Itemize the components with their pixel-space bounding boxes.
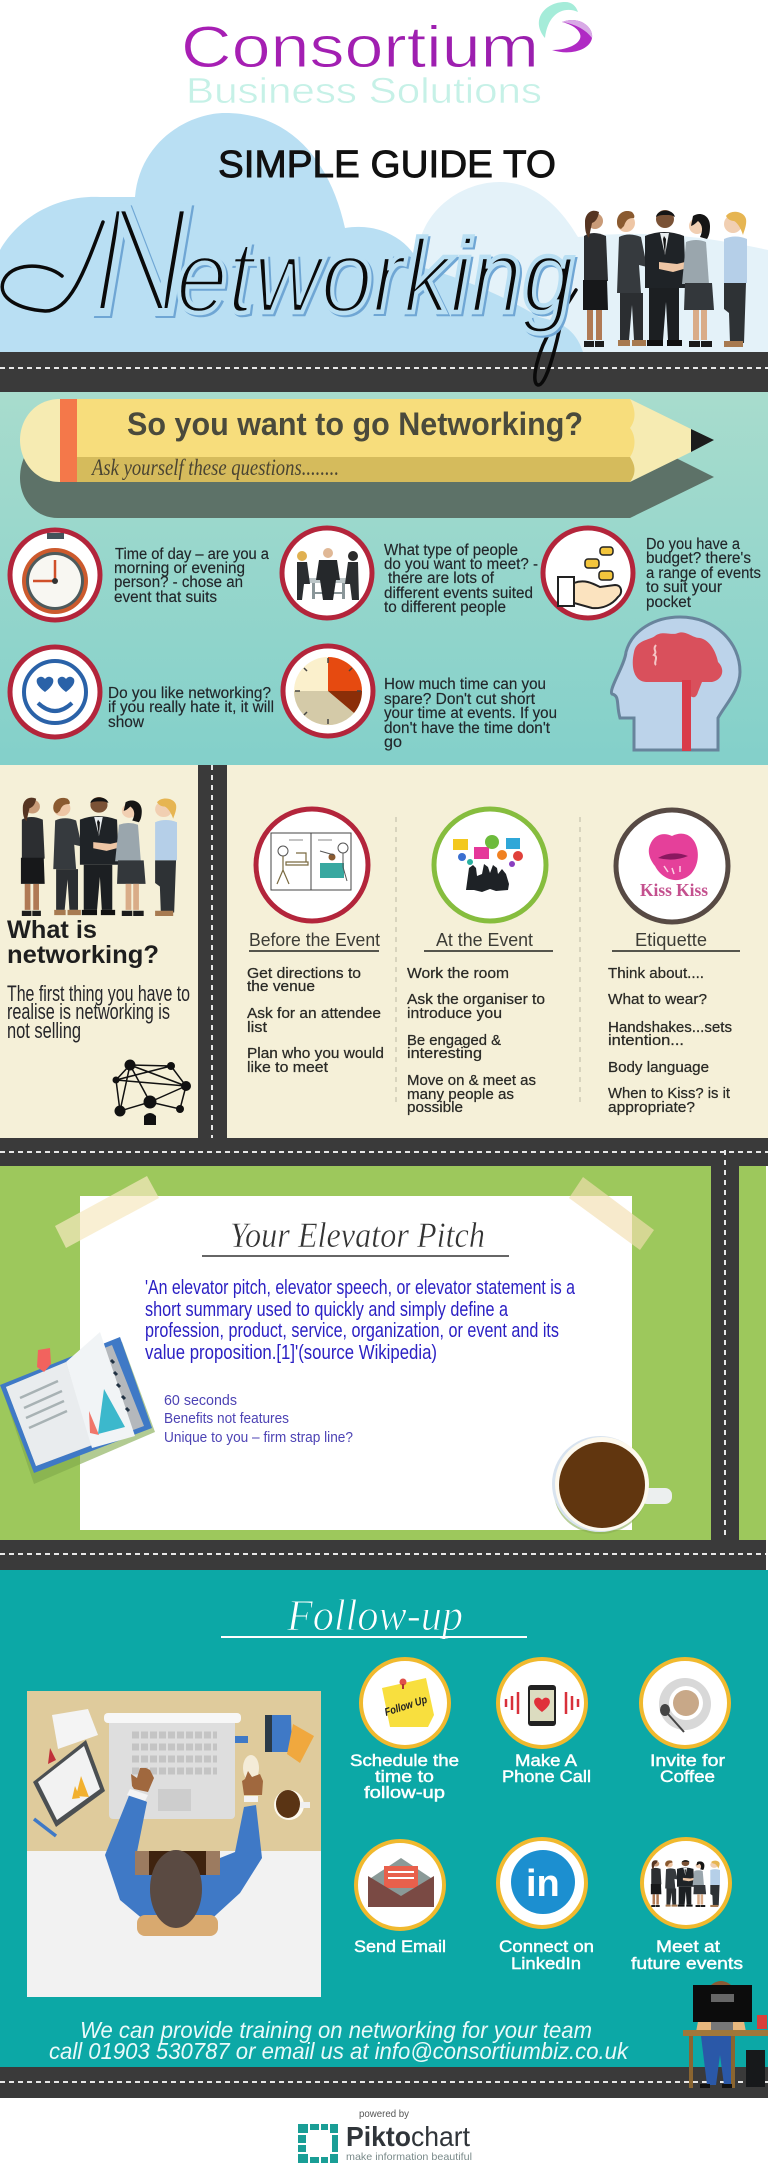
text: definition: 'An elevator pitch, elevator speech, or elevator statement is a [145,1277,576,1299]
heading: networking [2,175,576,385]
road: top [0,352,768,392]
label: schedule [350,1751,459,1802]
label: linkedin [499,1937,594,1973]
list: at the event: possible [407,1099,463,1116]
text: type of people [384,542,538,616]
text: budget [646,536,761,611]
text: budget: a range of events [646,565,761,582]
text: time of day: event that suits [114,589,217,606]
heading: etiquette [612,930,740,952]
text: definition [145,1277,576,1364]
panel: header [0,2,768,392]
list: etiquette: Body language [608,1059,709,1076]
tape left [55,1176,159,1248]
text: how much time [384,676,557,751]
text: time of day: person? - chose an [114,574,243,591]
list: etiquette: appropriate? [608,1099,695,1116]
list: etiquette: When to Kiss? is it [608,1085,731,1102]
heading: etiquette: Etiquette [635,930,707,950]
label: email: Send Email [354,1937,446,1956]
footer [298,2109,472,2163]
heading: what is networking: What is [7,916,97,944]
panel: follow-up [0,1570,768,2067]
panel: elevator pitch [0,1150,766,1540]
road: middle [0,1138,768,1166]
list: etiquette: Think about.... [608,965,704,982]
heading: what is networking: networking? [7,941,159,969]
label: coffee: Coffee [660,1767,715,1786]
logo wordmark: Consortium [181,15,539,80]
text: type of people: do you want to meet? - [384,556,538,573]
clouds [0,113,768,352]
illustration: person at laptop [27,1691,321,1997]
list: before the event [247,965,384,1076]
list: etiquette: intention... [608,1032,684,1049]
label: linkedin: LinkedIn [511,1954,581,1973]
pencil banner [20,399,714,518]
piktochart wordmark: Piktochart [346,2121,470,2152]
call to action: call 01903 530787 or email us at info@consortiumbiz.co.uk [49,2038,629,2064]
logo swirl [539,2,592,52]
label: coffee: Invite for [650,1751,725,1770]
heading: networking: etworking [176,219,574,335]
list: at the event: Move on & meet as [407,1072,536,1089]
list: before the event: Plan who you would [247,1045,384,1062]
people group [583,210,747,347]
heading: your elevator pitch: Your Elevator Pitch [230,1215,485,1255]
text: like networking: show [108,714,145,731]
text: like networking [108,685,274,731]
list: at the event: Ask the organiser to [407,991,545,1008]
list: before the event: the venue [247,978,315,995]
label: phone call: Make A [515,1751,578,1770]
heading: networking: N [92,175,188,345]
list: before the event: list [247,1019,268,1036]
icon: coffee [641,1659,729,1747]
label: schedule: follow-up [364,1783,445,1802]
icon: time pie [283,646,373,736]
label: schedule: time to [375,1767,434,1786]
list: before the event: Ask for an attendee [247,1005,381,1022]
icon: coins and hand [543,528,633,618]
icon: meeting [282,528,372,618]
label: future events [631,1937,743,1973]
text: like networking: if you really hate it, it will [108,699,274,716]
label: future events: future events [631,1954,743,1973]
text: definition: profession, product, service, organization, or event and its [145,1320,559,1342]
text: like networking: Do you like networking? [108,685,271,702]
icon: follow up note: Follow Up [383,1694,429,1719]
text: not selling [7,981,190,1043]
list: at the event [407,965,545,1116]
tape right [569,1177,654,1250]
text: type of people: to different people [384,599,506,616]
road: vertical between columns [198,765,227,1138]
text: how much time: How much time can you [384,676,546,693]
road: vertical right [711,1150,739,1540]
list: at the event: interesting [407,1045,482,1062]
pencil title: So you want to go Networking? [127,406,583,442]
list: at the event: Work the room [407,965,509,982]
text: type of people: there are lots of [388,570,495,587]
pencil subtitle: Ask yourself these questions........ [90,455,339,480]
list: etiquette: Handshakes...sets [608,1019,732,1036]
text: not selling: not selling [7,1018,81,1043]
icon: kiss [616,810,728,922]
text: time of day [114,546,269,606]
panel: what is networking [0,765,768,1138]
heading: at the event [424,930,553,952]
text: how much time: spare? Don't cut short [384,691,536,708]
list: at the event: introduce you [407,1005,502,1022]
heading: simple guide to: SIMPLE GUIDE TO [218,144,556,186]
text: how much time: go [384,734,402,751]
label: future events: Meet at [656,1937,720,1956]
call to action [49,2017,629,2064]
list: etiquette [608,965,732,1116]
paper card [80,1196,632,1530]
icon: linkedin: in [526,1863,560,1905]
list: before the event: like to meet [247,1059,329,1076]
label: schedule: Schedule the [350,1751,459,1770]
text: pitch tips: Benefits not features [164,1410,289,1427]
icon: kiss: Kiss Kiss [640,880,708,900]
list: etiquette: What to wear? [608,991,707,1008]
column dividers [396,817,580,1102]
text: pitch tips [164,1392,353,1446]
icon: at the event [434,809,546,921]
text: budget: pocket [646,594,692,611]
heading: what is networking [7,916,159,969]
text: time of day: morning or evening [114,560,245,577]
powered by: powered by [359,2109,409,2120]
call to action: We can provide training on networking for your team [80,2017,592,2043]
heading: before the event: Before the Event [249,930,380,950]
list: before the event: Get directions to [247,965,361,982]
text: budget: budget? there's [646,550,751,567]
icon: before the event [256,809,368,921]
icon: smiley [10,647,100,737]
logo tagline: Business Solutions [186,70,542,111]
icon: phone [498,1659,586,1747]
text: how much time: don't have the time don't [384,720,551,737]
label: phone call [502,1751,591,1786]
icon: linkedin [498,1839,586,1927]
people group [21,797,177,916]
road: bottom [0,2067,768,2098]
label: coffee [650,1751,725,1786]
text: definition: value proposition.[1]'(source Wikipedia) [145,1342,437,1364]
icon: follow up note [361,1659,449,1747]
text: budget: Do you have a [646,536,740,553]
heading: follow-up: Follow-up [286,1591,463,1640]
heading: at the event: At the Event [436,930,533,950]
piktochart tagline: make information beautiful [346,2151,472,2163]
text: definition: short summary used to quickly and simply define a [145,1299,509,1321]
icon: meeting people [642,1839,730,1927]
icon: clock [10,530,100,620]
text: type of people: What type of people [384,542,518,559]
icon: email [356,1841,444,1929]
text: pitch tips: 60 seconds [164,1392,237,1409]
text: budget: to suit your [646,579,722,596]
label: phone call: Phone Call [502,1767,591,1786]
text: type of people: different events suited [384,585,533,602]
text: not selling: The first thing you have to [7,981,190,1006]
text: how much time: your time at events. If you [384,705,557,722]
icon: coffee cup [552,1436,672,1534]
road: lower [0,1540,766,1570]
icon: network [112,1060,191,1125]
list: at the event: many people as [407,1086,514,1103]
icon: person at desk [683,1981,768,2088]
icon: head with brain [611,617,740,751]
list: at the event: Be engaged & [407,1032,501,1049]
text: time of day: Time of day – are you a [115,546,269,563]
icon: open book [0,1332,155,1484]
label: linkedin: Connect on [499,1937,594,1956]
text: pitch tips: Unique to you – firm strap line? [164,1429,353,1446]
panel: so you want to go networking [0,392,768,765]
piktochart logo icon [298,2124,338,2163]
text: not selling: realise is networking is [7,999,170,1024]
